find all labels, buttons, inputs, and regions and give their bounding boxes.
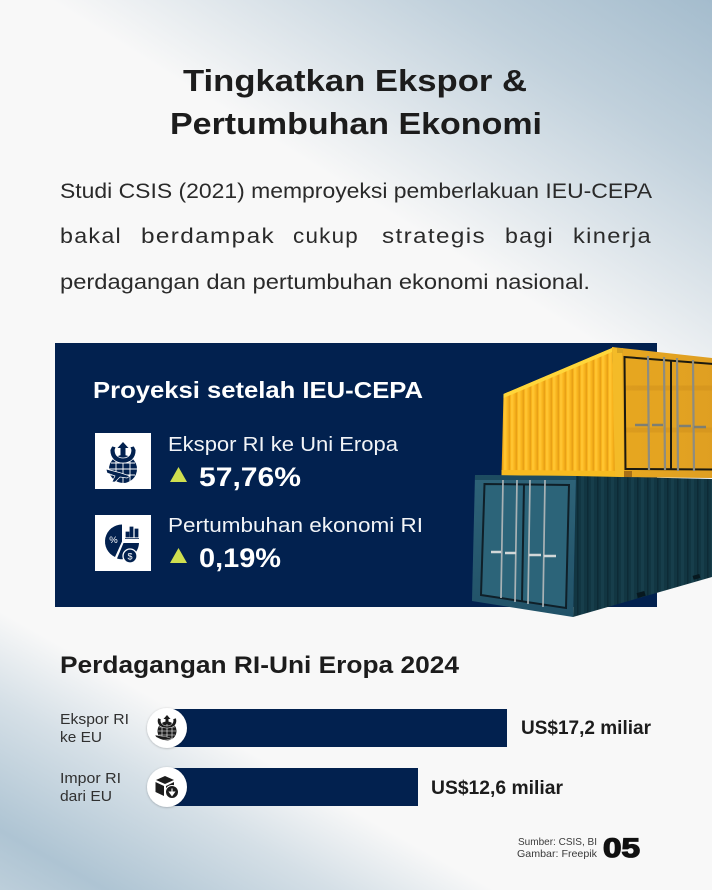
icon: export globe [95,433,151,489]
text: economic growth projection: Pertumbuhan ekonomi RI [168,515,423,537]
panel: projection after IEU-CEPA [55,343,657,607]
panel heading: Proyeksi setelah IEU-CEPA [93,377,423,403]
intro paragraph: bagi [505,224,554,248]
icon: up triangle [170,467,187,482]
row: export: Ekspor RI [60,712,129,728]
row: export: ke EU [60,730,102,746]
icon: export globe badge [147,708,187,748]
yellow container [502,347,712,478]
text: economic growth projection [168,515,423,573]
icon: import box badge [147,767,187,807]
intro paragraph: berdampak [141,224,275,248]
icon: economy pie chart [95,515,151,571]
text: economic growth projection: 0,19% [199,543,281,573]
intro paragraph: bakal [60,224,122,248]
title: Tingkatkan Ekspor & [183,63,527,98]
icon: economy pie chart: $ [127,552,133,562]
title [170,63,542,141]
icon: economy pie chart: % [109,535,118,546]
row: import: dari EU [60,789,112,805]
row: import [60,767,564,807]
illustration: stacked shipping containers [472,347,712,617]
row: import: US$12,6 miliar [431,778,564,799]
heading: trade 2024: Perdagangan RI-Uni Eropa 2024 [60,652,460,679]
intro paragraph: Studi CSIS (2021) memproyeksi pemberlakuan IEU-CEPA [60,179,653,203]
text: export projection: Ekspor RI ke Uni Eropa [168,434,399,456]
text: export projection: 57,76% [199,462,301,492]
source credit: Sumber: CSIS, BI [518,836,597,848]
intro paragraph: perdagangan dan pertumbuhan ekonomi nasional. [60,270,590,294]
text: export projection [168,434,399,492]
intro paragraph: kinerja [573,224,652,248]
source credit: Gambar: Freepik [517,848,598,860]
intro paragraph [60,179,653,294]
page number: 05 [603,833,640,863]
intro paragraph: strategis [382,224,486,248]
bar chart: EU trade [60,708,652,807]
row: export: US$17,2 miliar [521,718,652,739]
title: Pertumbuhan Ekonomi [170,106,542,141]
icon: up triangle [170,548,187,563]
row: import: Impor RI [60,771,121,787]
teal container [472,475,712,617]
intro paragraph: cukup [293,224,359,248]
row: export [60,708,652,748]
source credit [517,836,598,860]
